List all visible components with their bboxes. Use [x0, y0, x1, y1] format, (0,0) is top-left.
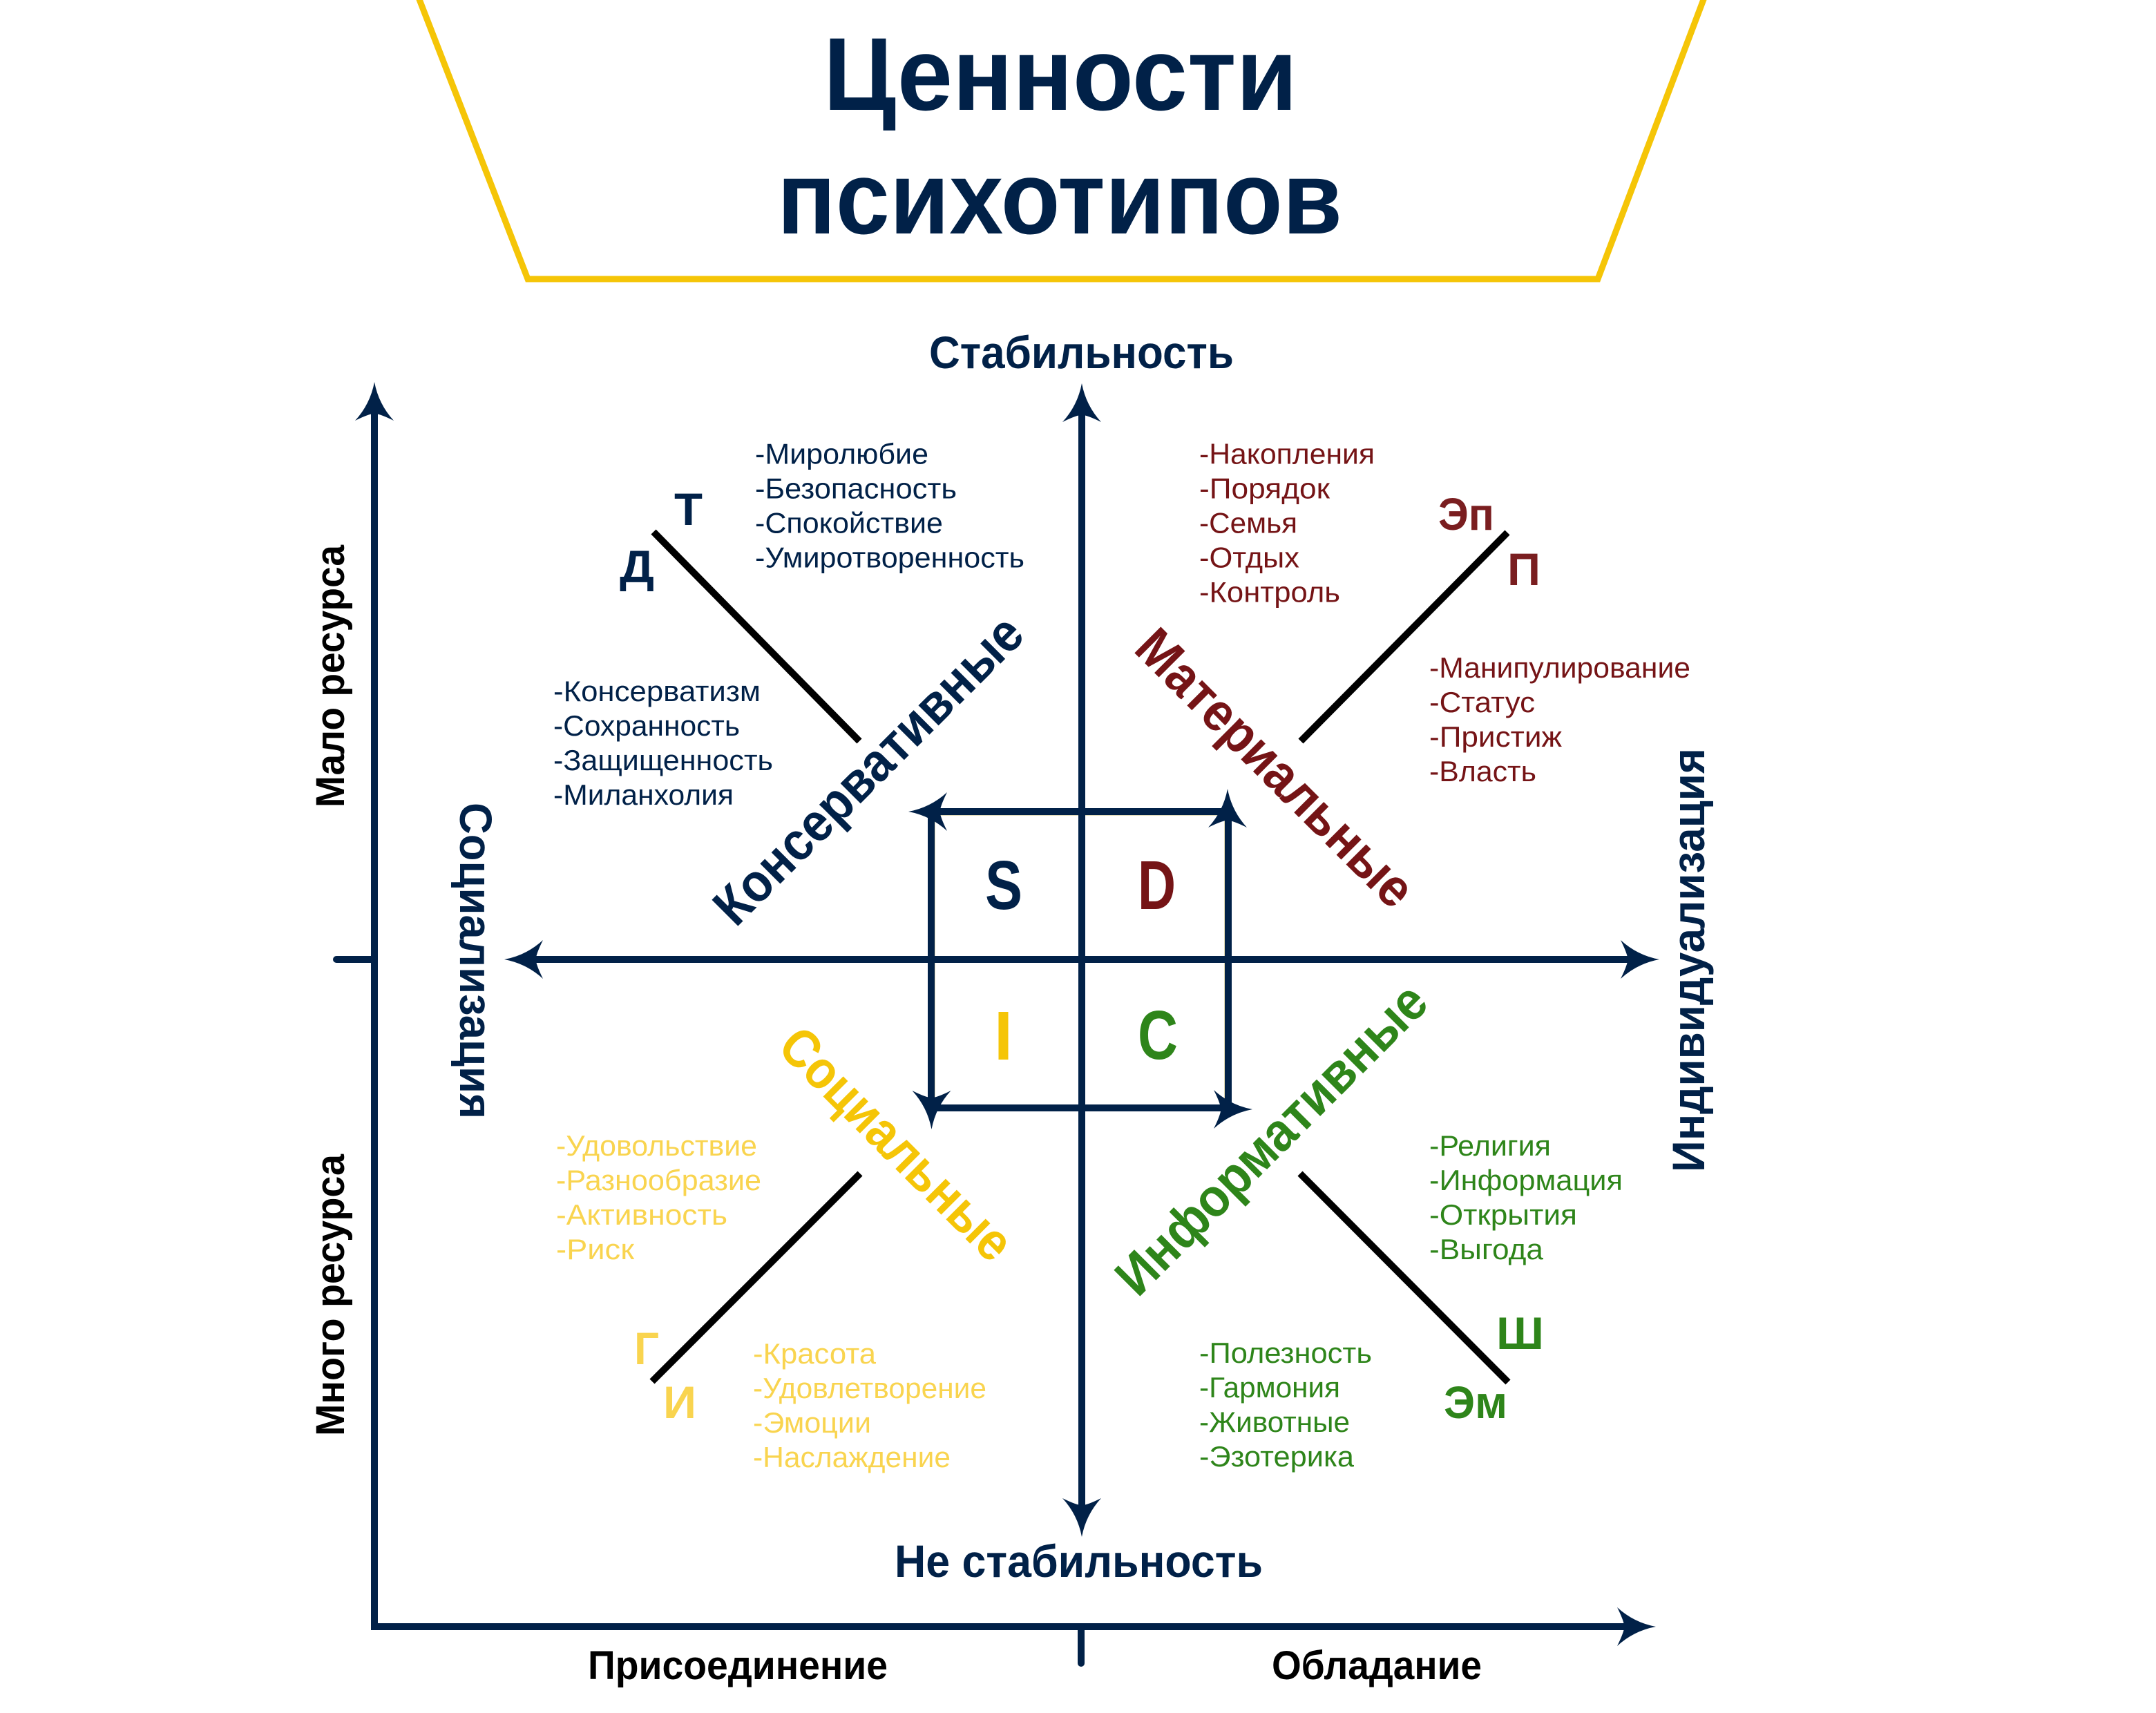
axis label: bottom: Не стабильность: [895, 1535, 1263, 1587]
value list upper: -Накопления: [1199, 438, 1375, 470]
axis: central vertical stability axis: [1062, 383, 1101, 1537]
value list upper: -Порядок: [1199, 472, 1330, 504]
divider line: [1300, 1174, 1508, 1382]
axis label: top: Стабильность: [929, 327, 1234, 378]
value list upper: -Риск: [556, 1233, 635, 1265]
value list upper: [755, 438, 1024, 573]
value list upper: [1199, 438, 1375, 608]
type letter D: Д: [620, 541, 654, 592]
value list upper: -Выгода: [1429, 1233, 1544, 1265]
value list upper: [1429, 1129, 1623, 1265]
diagonal heading: material: Материальные: [1124, 616, 1427, 919]
value list lower: -Животные: [1199, 1406, 1350, 1438]
axis label: right individualization: Индивидуализация: [1663, 748, 1714, 1172]
title: [777, 16, 1342, 256]
value list lower: -Эзотерика: [1199, 1440, 1355, 1473]
DISC square arrows: [908, 789, 1252, 1129]
value list lower: -Эмоции: [753, 1406, 871, 1439]
quadrant: informative: [1103, 971, 1623, 1473]
value list lower: -Полезность: [1199, 1337, 1372, 1369]
value list upper: -Активность: [556, 1198, 727, 1231]
value list lower: -Власть: [1429, 755, 1536, 787]
type letter I: И: [663, 1377, 696, 1428]
value list upper: -Контроль: [1199, 576, 1340, 608]
value list upper: -Отдых: [1199, 542, 1299, 573]
value list lower: -Наслаждение: [753, 1441, 951, 1473]
value list lower: -Статус: [1429, 686, 1535, 718]
type letter Sh: Ш: [1496, 1308, 1544, 1359]
quadrant: conservative: [553, 438, 1035, 937]
inner square underlay: [935, 815, 1225, 1105]
axis: central horizontal axis: [504, 940, 1659, 979]
value list upper: -Открытия: [1429, 1198, 1577, 1231]
axis label: left socialization: Социализация: [450, 803, 502, 1119]
value list upper: -Семья: [1199, 507, 1297, 539]
value list lower: -Красота: [753, 1337, 877, 1370]
diagonal heading: social: Социальные: [767, 1015, 1026, 1273]
value list lower: -Миланхолия: [553, 778, 734, 811]
DISC letter S: S: [985, 847, 1022, 924]
value list lower: [1199, 1337, 1372, 1473]
value list lower: -Консерватизм: [553, 675, 761, 707]
title: Ценности: [823, 16, 1297, 132]
quadrant: material: [1124, 438, 1690, 919]
axis: left vertical resource axis with arrow: [336, 382, 394, 1630]
type letters Ep: Эп: [1438, 488, 1494, 539]
diagonal heading: informative: Информативные: [1103, 971, 1439, 1307]
value list lower: -Сохранность: [553, 709, 740, 742]
value list lower: -Манипулирование: [1429, 651, 1690, 684]
value list upper: -Религия: [1429, 1129, 1551, 1162]
value list lower: -Гармония: [1199, 1371, 1340, 1404]
divider line: [654, 532, 859, 741]
title frame: yellow trapezoid: [418, 0, 1705, 279]
value list upper: -Умиротворенность: [755, 542, 1024, 573]
DISC letter C: C: [1138, 997, 1178, 1074]
value list upper: -Удовольствие: [556, 1129, 757, 1162]
value list upper: -Разнообразие: [556, 1164, 761, 1196]
divider line: [1301, 533, 1507, 741]
divider line: [652, 1174, 860, 1381]
type letter P: П: [1507, 544, 1540, 595]
type letters Em: Эм: [1444, 1377, 1507, 1428]
value list lower: -Защищенность: [553, 744, 773, 776]
outer label: possession: Обладание: [1272, 1643, 1482, 1688]
value list upper: -Безопасность: [755, 472, 957, 504]
diagonal heading: conservative: Консервативные: [701, 602, 1035, 937]
type letter G: Г: [634, 1323, 659, 1374]
value list upper: -Миролюбие: [755, 438, 928, 470]
value list lower: [753, 1337, 986, 1473]
outer label: many resources: Много ресурса: [308, 1154, 353, 1436]
DISC letter I: I: [994, 997, 1013, 1075]
title: психотипов: [777, 140, 1342, 256]
DISC letter D: D: [1138, 847, 1176, 924]
axis: bottom horizontal axis with arrow: [371, 1607, 1656, 1663]
outer label: few resources: Мало ресурса: [308, 544, 353, 807]
value list lower: -Пристиж: [1429, 720, 1562, 753]
value list lower: [553, 675, 773, 811]
value list lower: [1429, 651, 1690, 787]
type letter T: Т: [674, 484, 703, 535]
outer label: joining: Присоединение: [588, 1643, 888, 1688]
value list lower: -Удовлетворение: [753, 1372, 986, 1404]
value list upper: [556, 1129, 761, 1265]
quadrant: social: [556, 1015, 1026, 1473]
value list upper: -Спокойствие: [755, 507, 943, 539]
value list upper: -Информация: [1429, 1164, 1623, 1196]
